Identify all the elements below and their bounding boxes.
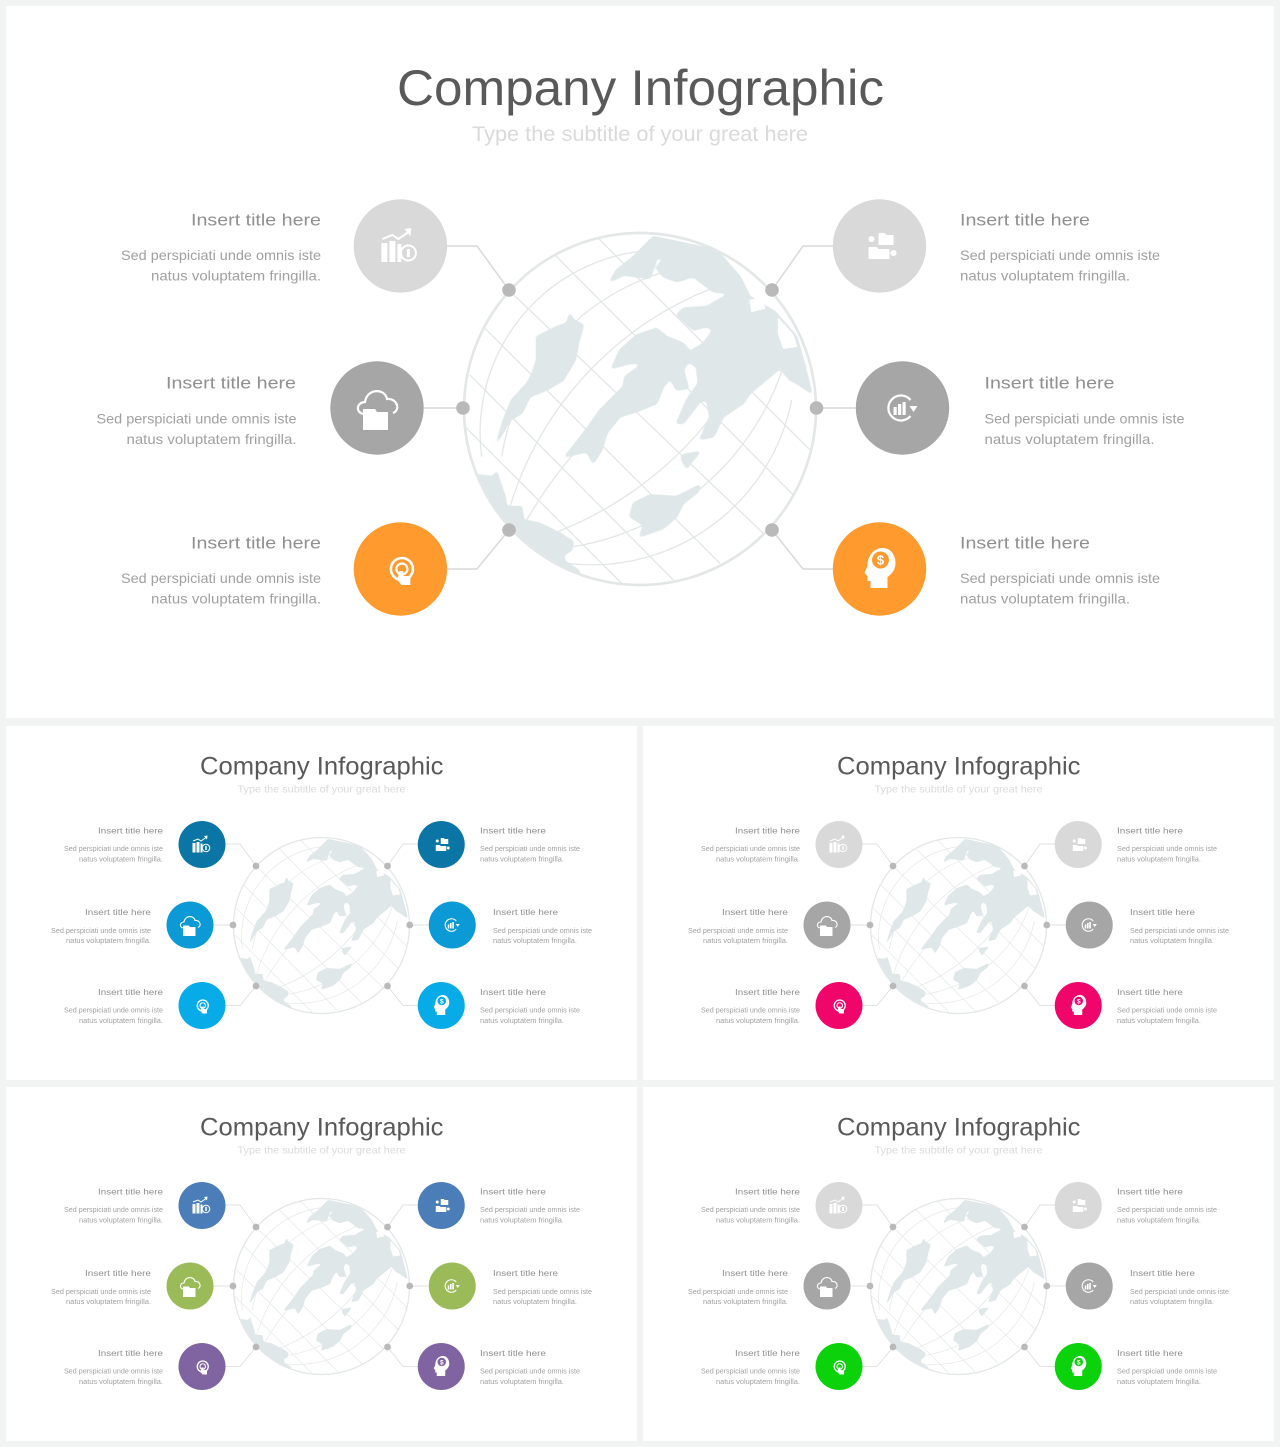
item: right top (1055, 821, 1217, 868)
panel: small slide, green (643, 1087, 1274, 1441)
item: left middle: Sed perspiciati unde omnis iste (688, 928, 788, 935)
item: left bottom: natus voluptatem fringilla. (79, 1379, 163, 1386)
item: left top: natus voluptatem fringilla. (716, 1217, 800, 1224)
item: right bottom: Insert title here (960, 534, 1090, 552)
item: left top: Sed perspiciati unde omnis iste (64, 1207, 163, 1214)
item: right top: Sed perspiciati unde omnis iste (480, 1207, 580, 1214)
item: right bottom: Sed perspiciati unde omnis iste (480, 1368, 580, 1376)
item: right bottom: natus voluptatem fringilla. (960, 590, 1130, 606)
item: right middle: Insert title here (1130, 1268, 1195, 1278)
item: right middle (429, 1262, 592, 1310)
item: left top (64, 821, 226, 868)
connector lines and dots (850, 844, 1066, 1006)
connector lines and dots (850, 1205, 1066, 1366)
globe (870, 837, 1046, 1016)
item: right bottom: natus voluptatem fringilla. (480, 1018, 564, 1025)
item: right middle: Sed perspiciati unde omnis iste (984, 410, 1185, 426)
item: left bottom: natus voluptatem fringilla. (716, 1379, 800, 1386)
title: Company Infographic (837, 1114, 1080, 1142)
title: Company Infographic (837, 752, 1080, 780)
item: right bottom: Sed perspiciati unde omnis iste (960, 570, 1160, 586)
item: right bottom: Sed perspiciati unde omnis iste (1117, 1368, 1217, 1376)
item: right middle: Insert title here (1130, 907, 1195, 917)
globe (233, 1198, 409, 1377)
item: left bottom: Insert title here (735, 1348, 800, 1358)
item: right top: natus voluptatem fringilla. (480, 1217, 564, 1224)
item: left bottom: natus voluptatem fringilla. (79, 1018, 163, 1025)
item: left top: Insert title here (98, 825, 163, 835)
item: left middle: Sed perspiciati unde omnis iste (96, 410, 297, 426)
item: left middle: Sed perspiciati unde omnis iste (51, 928, 151, 935)
item: left top (121, 199, 447, 293)
item: left middle (96, 361, 424, 455)
item: right top (418, 821, 580, 868)
item: left top: natus voluptatem fringilla. (716, 856, 800, 863)
globe (463, 233, 816, 590)
item: left middle: Insert title here (85, 1268, 151, 1278)
item: left bottom: Sed perspiciati unde omnis iste (701, 1008, 800, 1014)
item: right middle: Insert title here (493, 1268, 558, 1278)
item: right bottom: Sed perspiciati unde omnis iste (480, 1008, 580, 1014)
item: right top: Sed perspiciati unde omnis iste (480, 846, 580, 853)
item: right top (833, 199, 1160, 293)
item: left top: natus voluptatem fringilla. (79, 856, 163, 863)
item: right top: Sed perspiciati unde omnis iste (960, 247, 1160, 263)
item: right bottom (1055, 982, 1217, 1029)
item: right middle: Sed perspiciati unde omnis iste (493, 928, 592, 935)
item: right bottom: Insert title here (480, 1348, 546, 1358)
item: left top: Sed perspiciati unde omnis iste (64, 846, 163, 853)
item: right top (418, 1182, 580, 1229)
panel: small slide, pink (643, 726, 1274, 1080)
item: left top: Insert title here (735, 825, 800, 835)
item: left bottom: Insert title here (191, 534, 321, 552)
item: left middle: natus voluptatem fringilla. (66, 938, 151, 945)
item: left middle (688, 1262, 850, 1310)
item: right bottom (418, 1343, 580, 1390)
item: right bottom: Insert title here (1117, 987, 1183, 997)
item: left bottom: Insert title here (98, 1348, 163, 1358)
item: left middle: Insert title here (722, 907, 788, 917)
item: right top (1055, 1182, 1217, 1229)
connector lines and dots (214, 1205, 430, 1366)
item: left bottom (64, 982, 226, 1029)
item: right middle: natus voluptatem fringilla. (984, 431, 1154, 447)
item: right middle (429, 902, 592, 948)
item: left bottom: Insert title here (98, 987, 163, 997)
item: right top: natus voluptatem fringilla. (1117, 856, 1201, 863)
item: left top: Sed perspiciati unde omnis iste (701, 1207, 800, 1214)
item: left bottom (64, 1343, 226, 1390)
item: right top: Insert title here (1117, 1186, 1183, 1196)
item: right middle (856, 361, 1185, 455)
item: left bottom: Sed perspiciati unde omnis iste (121, 570, 321, 586)
item: right top: Sed perspiciati unde omnis iste (1117, 846, 1217, 853)
item: left bottom (701, 982, 862, 1029)
item: right middle: Sed perspiciati unde omnis iste (493, 1289, 592, 1296)
title: Company Infographic (200, 1114, 444, 1142)
connector lines and dots (424, 246, 856, 569)
item: left middle: Insert title here (85, 907, 151, 917)
item: left bottom: Insert title here (735, 987, 800, 997)
item: right bottom: Insert title here (1117, 1348, 1183, 1358)
panel: small slide, blue green purple (6, 1087, 637, 1441)
item: left bottom (701, 1343, 862, 1390)
subtitle: Type the subtitle of your great here (238, 1144, 406, 1156)
item: left bottom: Sed perspiciati unde omnis iste (701, 1368, 800, 1376)
item: right middle (1066, 902, 1229, 948)
item: left middle (688, 902, 850, 948)
item: left middle: natus voluptatem fringilla. (66, 1299, 151, 1306)
item: right top: Sed perspiciati unde omnis iste (1117, 1207, 1217, 1214)
item: left top: natus voluptatem fringilla. (79, 1217, 163, 1224)
item: left middle (51, 1262, 214, 1310)
item: left top: Insert title here (98, 1186, 163, 1196)
title: Company Infographic (397, 60, 884, 116)
item: right bottom: natus voluptatem fringilla. (480, 1379, 564, 1386)
panel: main slide, orange (6, 6, 1274, 718)
item: right top: Insert title here (480, 825, 546, 835)
panel: small slide, blue (6, 726, 637, 1080)
item: left top: Sed perspiciati unde omnis iste (121, 247, 321, 263)
item: left top (701, 1182, 862, 1229)
item: left middle: natus voluptatem fringilla. (703, 1299, 788, 1306)
item: left bottom (121, 522, 447, 616)
item: right top: natus voluptatem fringilla. (960, 268, 1130, 284)
item: right top: natus voluptatem fringilla. (480, 856, 564, 863)
item: right middle: Sed perspiciati unde omnis iste (1130, 928, 1229, 935)
item: left bottom: natus voluptatem fringilla. (151, 590, 321, 606)
title: Company Infographic (200, 752, 444, 780)
item: right middle (1066, 1262, 1229, 1310)
item: left middle: natus voluptatem fringilla. (703, 938, 788, 945)
item: left top: Insert title here (735, 1186, 800, 1196)
subtitle: Type the subtitle of your great here (472, 123, 808, 146)
item: left bottom: Sed perspiciati unde omnis iste (64, 1008, 163, 1014)
item: left middle: Insert title here (166, 374, 296, 392)
subtitle: Type the subtitle of your great here (874, 1144, 1043, 1156)
item: left top (701, 821, 862, 868)
item: right bottom: Sed perspiciati unde omnis iste (1117, 1008, 1217, 1014)
item: right middle: natus voluptatem fringilla. (493, 938, 577, 945)
item: left top: Sed perspiciati unde omnis iste (701, 846, 800, 853)
item: right middle: natus voluptatem fringilla. (1130, 1299, 1214, 1306)
item: left middle: Insert title here (722, 1268, 788, 1278)
item: right top: Insert title here (960, 210, 1090, 230)
item: right bottom (1055, 1343, 1217, 1390)
item: right middle: Insert title here (493, 907, 558, 917)
item: right middle: natus voluptatem fringilla. (493, 1299, 577, 1306)
item: left middle (51, 902, 214, 948)
item: right bottom: natus voluptatem fringilla. (1117, 1379, 1201, 1386)
item: left bottom: Sed perspiciati unde omnis iste (64, 1368, 163, 1376)
item: right top: natus voluptatem fringilla. (1117, 1217, 1201, 1224)
item: right top: Insert title here (480, 1186, 546, 1196)
item: left middle: Sed perspiciati unde omnis iste (51, 1289, 151, 1296)
connector lines and dots (214, 844, 430, 1006)
item: left top: natus voluptatem fringilla. (151, 268, 321, 284)
item: left top: Insert title here (191, 210, 321, 230)
item: right bottom: Insert title here (480, 987, 546, 997)
item: left middle: Sed perspiciati unde omnis iste (688, 1289, 788, 1296)
item: right middle: Sed perspiciati unde omnis iste (1130, 1289, 1229, 1296)
subtitle: Type the subtitle of your great here (874, 784, 1043, 796)
globe (870, 1198, 1046, 1377)
item: right top: Insert title here (1117, 825, 1183, 835)
item: left bottom: natus voluptatem fringilla. (716, 1018, 800, 1025)
item: right bottom (833, 522, 1160, 616)
subtitle: Type the subtitle of your great here (238, 784, 406, 796)
item: right middle: Insert title here (984, 374, 1114, 392)
item: right bottom (418, 982, 580, 1029)
item: right middle: natus voluptatem fringilla. (1130, 938, 1214, 945)
item: left middle: natus voluptatem fringilla. (126, 431, 296, 447)
item: left top (64, 1182, 226, 1229)
item: right bottom: natus voluptatem fringilla. (1117, 1018, 1201, 1025)
globe (233, 837, 409, 1016)
